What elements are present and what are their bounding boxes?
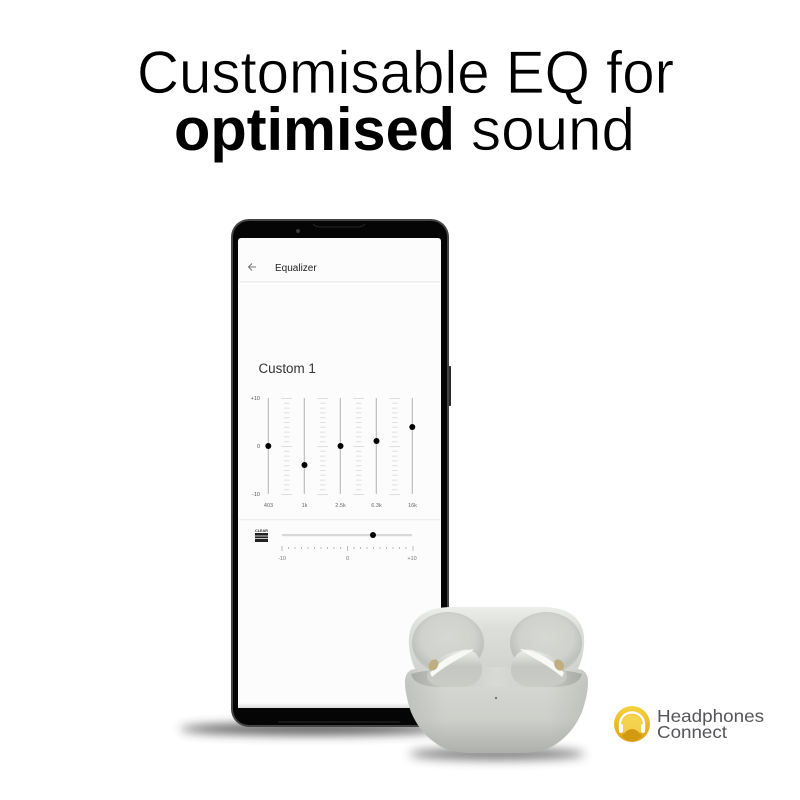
bass ticks	[282, 546, 413, 551]
clear bass control	[255, 529, 417, 562]
phone screen	[238, 238, 441, 708]
bass scale labels: 0	[346, 556, 349, 562]
earpiece	[313, 224, 365, 227]
status light	[495, 697, 497, 699]
screen heading: Equalizer	[275, 263, 317, 274]
logo wordmark: Headphones	[657, 706, 764, 726]
case inner tray	[411, 667, 582, 687]
phone side button	[447, 366, 451, 406]
logo wordmark	[657, 706, 764, 742]
bass knob	[370, 532, 376, 538]
clear bass icon: CLEAR	[255, 529, 268, 533]
left earbud gold mic	[427, 658, 440, 672]
frequency labels	[264, 503, 417, 509]
left lid recess	[412, 612, 484, 674]
scale labels: 0	[257, 444, 260, 450]
bass track	[282, 534, 412, 536]
case lid	[409, 607, 584, 680]
right earbud gold mic	[552, 658, 566, 672]
frequency labels: 1k	[302, 503, 308, 509]
title: Customisable EQ for	[137, 39, 674, 106]
phone shadow	[180, 723, 444, 735]
scale labels: +10	[251, 396, 260, 402]
title: sound	[471, 96, 635, 163]
frequency labels: 6.3k	[371, 503, 382, 509]
left earbud	[427, 649, 482, 687]
title: optimised	[174, 96, 455, 163]
Headphones Connect logo	[614, 706, 764, 742]
bass scale labels	[278, 556, 417, 562]
right lid recess	[510, 612, 582, 674]
bass scale labels: +10	[407, 556, 417, 562]
case shadow	[409, 748, 585, 760]
case base	[405, 669, 588, 753]
frequency labels: 403	[264, 503, 273, 509]
phone body	[231, 219, 449, 727]
logo icon	[614, 706, 650, 742]
scale labels: -10	[252, 492, 260, 498]
logo wordmark: Connect	[657, 722, 727, 742]
equalizer chart	[251, 396, 417, 509]
phone	[231, 219, 451, 727]
right earbud	[511, 649, 567, 687]
frequency labels: 2.5k	[335, 503, 346, 509]
bass scale labels: -10	[278, 556, 286, 562]
preset name: Custom 1	[258, 361, 316, 376]
earbuds case	[405, 607, 588, 753]
scale labels	[251, 396, 260, 498]
tick columns	[282, 398, 400, 494]
clear bass icon	[255, 529, 268, 542]
frequency labels: 16k	[408, 503, 417, 509]
title	[137, 39, 674, 163]
slider tracks	[268, 398, 412, 494]
back arrow	[248, 264, 256, 270]
bottom speaker line	[278, 721, 400, 723]
slider knobs	[265, 424, 415, 468]
front camera	[296, 229, 300, 233]
